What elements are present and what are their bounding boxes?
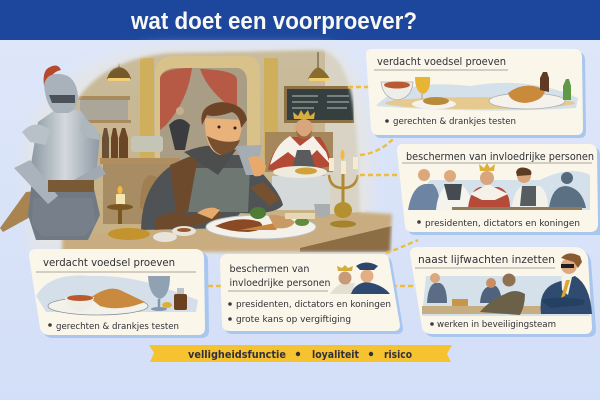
panel: beschermen van invloedrijke personen small: presidenten, dictators en koningen bbox=[236, 299, 391, 310]
panel: beschermen van invloedrijke personen small bbox=[220, 254, 403, 334]
bullet text bbox=[228, 302, 232, 306]
pillars and arch bbox=[140, 56, 278, 170]
heading: verdacht voedsel proeven bbox=[43, 257, 175, 269]
chalkboard bbox=[284, 86, 354, 123]
panel: verdacht voedsel proeven top: gerechten & drankjes testen bbox=[393, 116, 516, 127]
connector lines bbox=[192, 87, 420, 286]
panel: beschermen van invloedrijke personen bbox=[397, 144, 600, 235]
table bbox=[330, 212, 365, 215]
panel: verdacht voedsel proeven top bbox=[366, 49, 586, 138]
panel: beschermen van invloedrijke personen: presidenten, dictators en koningen bbox=[425, 218, 580, 229]
panel: beschermen van invloedrijke personen small: grote kans op vergiftiging bbox=[236, 314, 351, 325]
ribbon keywords: velligheidsfunctie bbox=[188, 348, 286, 361]
dish bowls bbox=[153, 226, 196, 242]
candelabra bbox=[329, 150, 358, 228]
heading: beschermen van bbox=[230, 264, 310, 275]
icon: king and officer bbox=[330, 262, 390, 294]
food illustration bbox=[376, 72, 578, 111]
panel: naast lijfwachten inzetten bbox=[410, 247, 596, 337]
bullet text bbox=[417, 220, 421, 224]
bullet text bbox=[48, 323, 52, 327]
main plate bbox=[206, 204, 330, 239]
keyword ribbon: risico bbox=[384, 348, 412, 361]
illustration: restaurant scene bbox=[0, 45, 395, 255]
shelves with bottles bbox=[78, 96, 180, 224]
background waiter bbox=[169, 107, 190, 150]
panel: beschermen van invloedrijke personen small: invloedrijke personen bbox=[230, 278, 330, 289]
knight bbox=[0, 66, 106, 240]
bullet text bbox=[385, 119, 389, 123]
header band bbox=[0, 0, 600, 40]
man tasting bbox=[140, 102, 283, 230]
heading: verdacht voedsel proeven bbox=[377, 56, 506, 68]
food illustration bbox=[36, 275, 198, 315]
keyword ribbon: loyaliteit bbox=[312, 348, 359, 361]
king at table bbox=[265, 110, 333, 210]
title: wat doet een voorproever? bbox=[130, 8, 417, 35]
panel: verdacht voedsel proeven bottom: gerechten & drankjes testen bbox=[56, 321, 179, 332]
meeting illustration bbox=[422, 253, 592, 316]
panel: verdacht voedsel proeven bottom bbox=[29, 249, 209, 338]
keyword ribbon bbox=[149, 345, 452, 362]
panel: naast lijfwachten inzetten: werken in beveiligingsteam bbox=[437, 319, 556, 330]
bullet text bbox=[430, 322, 434, 326]
people illustration bbox=[408, 163, 590, 210]
heading: naast lijfwachten inzetten bbox=[418, 254, 555, 266]
small candle bbox=[107, 186, 150, 240]
lamps bbox=[107, 52, 330, 81]
